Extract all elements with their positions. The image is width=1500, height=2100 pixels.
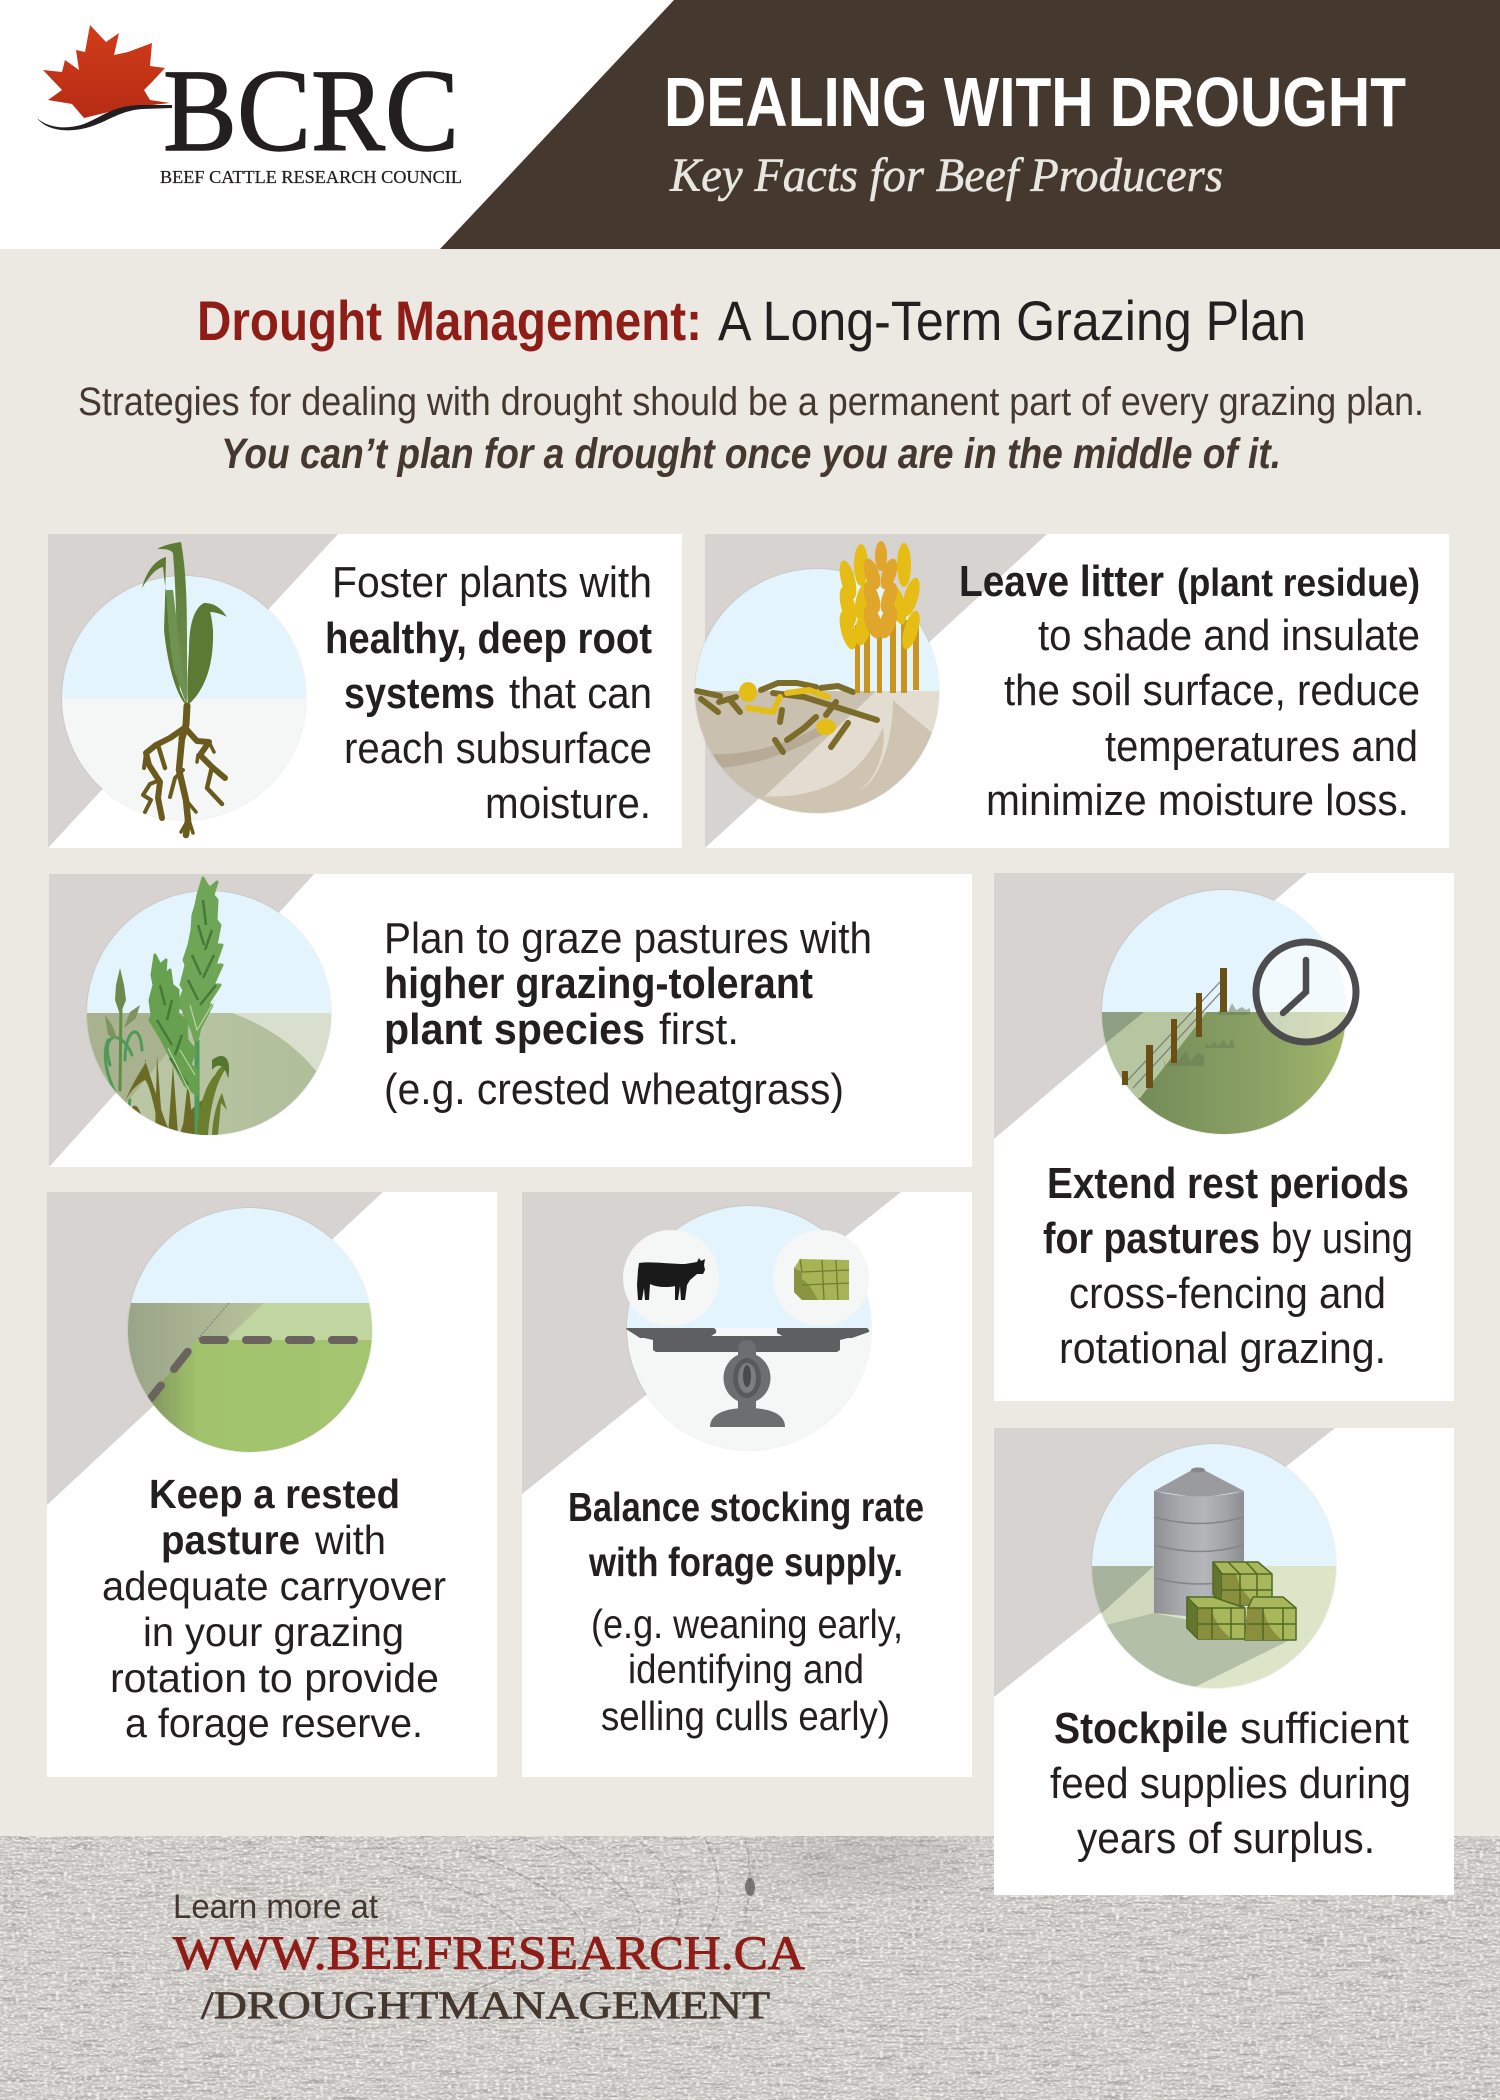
panel text: first.: [659, 1005, 739, 1054]
panel text: (plant residue): [1177, 562, 1420, 605]
panel text: reach subsurface: [344, 724, 652, 773]
scale pans and beam: [626, 1328, 869, 1352]
panel text: healthy, deep root: [325, 614, 652, 663]
wheat stalks: [855, 620, 919, 693]
panel: stocking rate: [522, 1192, 972, 1777]
panel text: [325, 558, 652, 828]
panel text: that can: [509, 669, 652, 718]
panel: extend rest periods: [994, 873, 1454, 1401]
icon: rested pasture with fence: [127, 1207, 373, 1453]
panel text: adequate carryover: [102, 1563, 446, 1609]
panel text: (e.g. weaning early,: [591, 1601, 903, 1647]
icon: balance scale: [620, 1200, 880, 1453]
icon: plant with roots: [60, 542, 310, 835]
panel text: years of surplus.: [1077, 1814, 1375, 1863]
panel text: Plan to graze pastures with: [384, 914, 872, 963]
icon: maple leaf: [43, 25, 170, 118]
panel: deep roots: [48, 534, 682, 848]
panel text: moisture.: [485, 779, 651, 828]
panel text: systems: [344, 669, 495, 718]
panel text: Leave litter: [959, 557, 1164, 606]
footer call to action: [173, 1888, 805, 2027]
scale stand: [710, 1340, 785, 1427]
panel text: selling culls early): [601, 1693, 890, 1739]
section heading: [197, 289, 1306, 352]
panel: litter: [690, 534, 1449, 848]
icon: silo and hay bales: [1085, 1440, 1345, 1691]
panel text: in your grazing: [143, 1609, 404, 1655]
panel text: to shade and insulate: [1038, 611, 1420, 660]
panel text: Keep a rested: [149, 1471, 400, 1517]
icon: fence and clock: [1095, 885, 1356, 1137]
website path: /DROUGHTMANAGEMENT: [201, 1984, 770, 2027]
panel text: cross-fencing and: [1069, 1269, 1386, 1318]
silo: [1154, 1468, 1244, 1622]
header band: [0, 0, 1500, 249]
panel text: [384, 914, 872, 1114]
panel text: minimize moisture loss.: [986, 776, 1409, 825]
panel: stockpile: [994, 1428, 1454, 1895]
panel text: pasture: [161, 1517, 300, 1563]
panel text: plant species: [384, 1005, 645, 1054]
panel text: Balance stocking rate: [568, 1484, 924, 1530]
panel text: [1050, 1704, 1411, 1863]
icon: wheat and litter: [690, 541, 945, 816]
litter: [697, 683, 877, 752]
panel text: the soil surface, reduce: [1004, 666, 1420, 715]
panel text: for pastures: [1043, 1214, 1260, 1263]
footer wood texture: [0, 1830, 1500, 2100]
panel text: with: [314, 1517, 386, 1563]
panel text: Extend rest periods: [1047, 1159, 1409, 1208]
panel text: sufficient: [1240, 1704, 1409, 1753]
fence line: [151, 1340, 372, 1398]
panel text: [568, 1484, 924, 1739]
logo wordmark: BCRC: [163, 45, 459, 176]
subtitle: Key Facts for Beef Producers: [669, 149, 1223, 202]
panel text: with forage supply.: [588, 1539, 903, 1585]
logo: BCRC: [37, 25, 462, 187]
panel text: a forage reserve.: [125, 1700, 423, 1746]
panel text: Stockpile: [1054, 1704, 1228, 1753]
panel text: Foster plants with: [332, 558, 652, 607]
panel: rested pasture: [47, 1192, 497, 1777]
icon: clock: [1256, 942, 1356, 1042]
panel text: [959, 557, 1420, 825]
panel text: [102, 1471, 446, 1746]
icon: crested wheatgrass: [80, 878, 340, 1138]
logo tagline: BEEF CATTLE RESEARCH COUNCIL: [160, 167, 462, 187]
panel: grazing-tolerant species: [49, 874, 972, 1167]
heading regular part: A Long-Term Grazing Plan: [718, 289, 1306, 352]
hay bales: [1187, 1562, 1296, 1640]
swoosh: [37, 105, 172, 130]
panel text: higher grazing-tolerant: [384, 959, 813, 1008]
learn more label: Learn more at: [173, 1888, 379, 1926]
panel text: temperatures and: [1105, 722, 1418, 771]
icon: cow: [637, 1258, 705, 1300]
panel text: [1043, 1159, 1413, 1373]
website url: WWW.BEEFRESEARCH.CA: [173, 1927, 805, 1980]
panel text: rotation to provide: [110, 1655, 439, 1701]
intro text: [78, 380, 1424, 478]
icon: hay bale: [794, 1259, 849, 1300]
heading bold part: Drought Management:: [197, 289, 702, 352]
intro emphasis: You can’t plan for a drought once you are in the middle of it.: [221, 430, 1281, 478]
panel text: (e.g. crested wheatgrass): [384, 1065, 844, 1114]
panel text: rotational grazing.: [1059, 1324, 1386, 1373]
panel text: feed supplies during: [1050, 1759, 1411, 1808]
panel text: by using: [1271, 1214, 1413, 1263]
header dark banner: [440, 0, 1500, 249]
panel text: identifying and: [628, 1646, 864, 1692]
